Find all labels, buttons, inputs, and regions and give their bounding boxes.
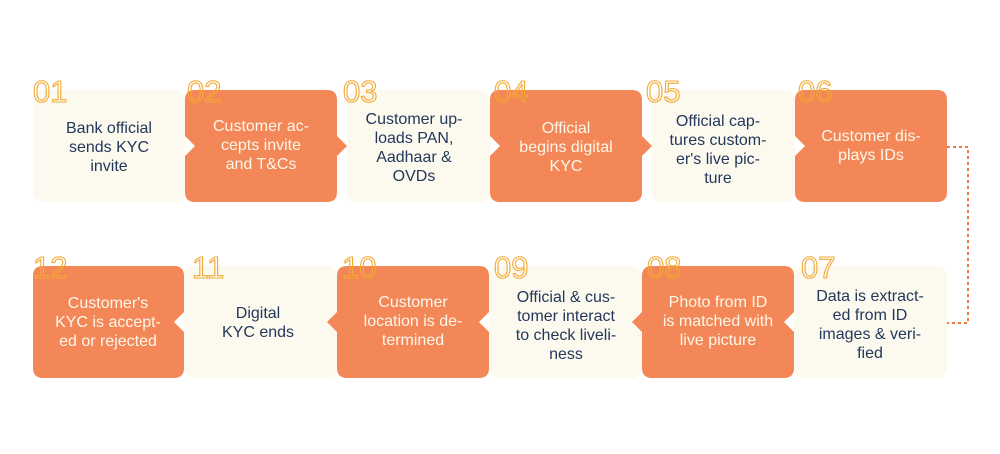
step 02: cepts invite bbox=[221, 137, 301, 154]
step 12: 12 bbox=[33, 250, 67, 285]
connector: dotted line from step 06 to 07 bbox=[947, 147, 968, 323]
step 05 bbox=[646, 74, 795, 202]
step 11: Digital bbox=[236, 305, 280, 322]
step 06 bbox=[795, 74, 947, 202]
step 06: 06 bbox=[798, 74, 832, 109]
step 07: ed from ID bbox=[833, 307, 907, 324]
step 11: KYC ends bbox=[222, 324, 294, 341]
step 09: tomer interact bbox=[517, 308, 615, 325]
step 09: ness bbox=[549, 346, 583, 363]
step 04: KYC bbox=[550, 158, 582, 175]
step 12: Customer's bbox=[68, 295, 148, 312]
step 01: Bank official bbox=[66, 120, 152, 137]
step 08: 08 bbox=[647, 250, 681, 285]
step 03: Customer up- bbox=[366, 111, 462, 128]
step 07: images & veri- bbox=[819, 326, 921, 343]
step 09 bbox=[489, 250, 642, 378]
step 10: location is de- bbox=[364, 313, 462, 330]
step 02: Customer ac- bbox=[213, 118, 309, 135]
step 08: Photo from ID bbox=[669, 294, 767, 311]
step 08 bbox=[632, 250, 794, 378]
step 03: Aadhaar & bbox=[376, 149, 452, 166]
step 04 bbox=[490, 74, 652, 202]
step 05: 05 bbox=[646, 74, 680, 109]
step 02: 02 bbox=[187, 74, 221, 109]
step 02 bbox=[185, 74, 347, 202]
step 07: Data is extract- bbox=[816, 288, 924, 305]
step 01: 01 bbox=[33, 74, 67, 109]
step 03: loads PAN, bbox=[375, 130, 453, 147]
step 10: Customer bbox=[378, 294, 448, 311]
step 08: is matched with bbox=[663, 313, 773, 330]
step 05: ture bbox=[704, 170, 732, 187]
step 01: sends KYC bbox=[69, 139, 149, 156]
step 04: Official bbox=[542, 120, 590, 137]
step 06: plays IDs bbox=[838, 147, 904, 164]
step 10: 10 bbox=[342, 250, 376, 285]
step 04: 04 bbox=[494, 74, 528, 109]
step 04: begins digital bbox=[519, 139, 613, 156]
step 03 bbox=[343, 74, 490, 202]
step 07 bbox=[794, 250, 947, 378]
step 03: 03 bbox=[343, 74, 377, 109]
step 01: invite bbox=[90, 158, 128, 175]
step 06: Customer dis- bbox=[821, 128, 921, 145]
step 11 bbox=[184, 250, 337, 378]
step 05: tures custom- bbox=[670, 132, 766, 149]
step 09: 09 bbox=[494, 250, 528, 285]
step 03: OVDs bbox=[393, 168, 435, 185]
step 07: 07 bbox=[801, 250, 835, 285]
step 12 bbox=[33, 250, 184, 378]
step 11: 11 bbox=[192, 250, 224, 285]
step 09: Official & cus- bbox=[517, 289, 615, 306]
step 09: to check liveli- bbox=[516, 327, 616, 344]
step 07: fied bbox=[857, 345, 883, 362]
step 12: KYC is accept- bbox=[55, 314, 161, 331]
step 12: ed or rejected bbox=[59, 333, 157, 350]
step 02: and T&Cs bbox=[226, 156, 296, 173]
step 10 bbox=[327, 250, 489, 378]
step 01 bbox=[33, 74, 185, 202]
step 05: Official cap- bbox=[676, 113, 760, 130]
step 05: er's live pic- bbox=[676, 151, 760, 168]
step 08: live picture bbox=[680, 332, 756, 349]
step 10: termined bbox=[382, 332, 444, 349]
